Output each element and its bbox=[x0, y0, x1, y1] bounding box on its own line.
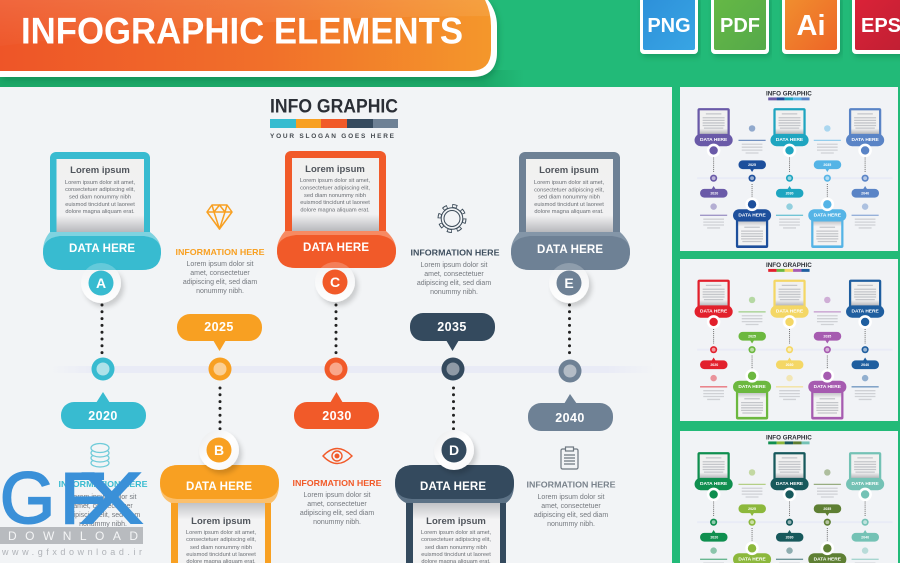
watermark: GFX Download: G bbox=[0, 459, 55, 539]
green band under header bbox=[0, 70, 672, 87]
card B: euismod tincidunt ut laoreet bbox=[186, 552, 256, 558]
thumbnail: rainbow variant: 2025 bbox=[748, 335, 756, 339]
watermark: GFX Download: F bbox=[60, 459, 106, 539]
year bubble 2040 bbox=[528, 394, 613, 431]
information block E: amet, consectetuer bbox=[541, 503, 601, 510]
marker D: D bbox=[449, 442, 459, 458]
marker D bbox=[434, 430, 474, 470]
card C: dolore magna aliquam erat. bbox=[300, 208, 370, 214]
thumbnail: rainbow variant: 2040 bbox=[861, 363, 869, 367]
pill A: DATA HERE bbox=[69, 243, 135, 255]
badge: PDF: PDF bbox=[720, 15, 760, 37]
badge: EPS bbox=[852, 0, 900, 54]
card D: sed diam nonummy nibh bbox=[425, 545, 487, 551]
information block E: Lorem ipsum dolor sit bbox=[538, 494, 605, 501]
node B bbox=[208, 358, 232, 380]
pill D: DATA HERE bbox=[420, 481, 486, 493]
column D bbox=[395, 206, 514, 563]
card A bbox=[50, 152, 150, 232]
card D: Lorem ipsum dolor sit amet, bbox=[421, 530, 492, 536]
pill C bbox=[277, 231, 396, 268]
information block C: amet, consectetuer bbox=[307, 501, 367, 508]
connector A bbox=[100, 305, 104, 353]
watermark: GFX Download bbox=[0, 459, 143, 557]
card E: euismod tincidunt ut laoreet bbox=[534, 202, 604, 208]
icon: diamond bbox=[207, 205, 232, 229]
icon: eye bbox=[323, 448, 352, 464]
information block E: INFORMATION HERE bbox=[526, 480, 616, 490]
information block D: adipiscing elit, sed diam bbox=[417, 280, 491, 287]
card E: dolore magna aliquam erat. bbox=[534, 209, 604, 215]
node D bbox=[442, 358, 464, 380]
thumbnail: blue variant: INFO GRAPHIC bbox=[766, 90, 812, 97]
timeline band bbox=[114, 366, 612, 373]
marker C: C bbox=[330, 274, 340, 290]
card C bbox=[285, 151, 386, 231]
badge: Ai bbox=[782, 0, 840, 54]
node A bbox=[92, 358, 114, 380]
information block D: Lorem ipsum dolor sit bbox=[421, 262, 488, 269]
card E: sed diam nonummy nibh bbox=[538, 194, 600, 200]
pill A bbox=[43, 232, 161, 270]
column B bbox=[160, 205, 279, 563]
card A: Lorem ipsum dolor sit amet, bbox=[65, 180, 136, 186]
thumbnail: green variant: 2020 bbox=[710, 536, 718, 540]
year bubble 2040: 2040 bbox=[555, 411, 585, 425]
year bubble 2035: 2035 bbox=[437, 320, 467, 334]
connector B bbox=[218, 388, 222, 431]
infographic heading: YOUR SLOGAN GOES HERE bbox=[270, 133, 395, 140]
information block C: Lorem ipsum dolor sit bbox=[304, 492, 371, 499]
information block C: adipiscing elit, sed diam bbox=[300, 510, 374, 517]
year bubble 2020 bbox=[61, 392, 146, 429]
card A: dolore magna aliquam erat. bbox=[65, 209, 135, 215]
marker E: E bbox=[564, 275, 574, 291]
icon: gear bbox=[440, 206, 464, 231]
card B: consectetuer adipiscing elit, bbox=[186, 537, 256, 543]
card C: consectetuer adipiscing elit, bbox=[300, 186, 370, 192]
thumbnail: rainbow variant: INFO GRAPHIC bbox=[766, 262, 812, 269]
infographic heading bbox=[270, 99, 398, 138]
watermark: GFX Download: DOWNLOAD bbox=[8, 529, 138, 543]
information block A: adipiscing elit, sed diam bbox=[66, 512, 140, 519]
badge: PNG: PNG bbox=[647, 15, 691, 37]
card E: Lorem ipsum dolor sit amet, bbox=[534, 180, 605, 186]
marker A bbox=[81, 263, 121, 303]
marker B bbox=[199, 430, 239, 470]
icon: database bbox=[91, 444, 109, 467]
year bubble 2030: 2030 bbox=[322, 409, 352, 423]
title: INFOGRAPHIC ELEMENTS bbox=[21, 10, 463, 52]
pill C: DATA HERE bbox=[303, 242, 369, 254]
watermark: GFX Download: X bbox=[80, 459, 143, 539]
card A: euismod tincidunt ut laoreet bbox=[65, 202, 135, 208]
card E bbox=[519, 152, 620, 242]
year bubble 2025 bbox=[177, 314, 262, 351]
column A bbox=[43, 152, 161, 528]
card C: Lorem ipsum dolor sit amet, bbox=[300, 178, 371, 184]
card C: Lorem ipsum bbox=[305, 164, 365, 175]
card D: consectetuer adipiscing elit, bbox=[421, 537, 491, 543]
card D: euismod tincidunt ut laoreet bbox=[421, 552, 491, 558]
pill E: DATA HERE bbox=[537, 244, 603, 256]
column E bbox=[511, 152, 630, 528]
card B: Lorem ipsum dolor sit amet, bbox=[186, 530, 257, 536]
card C: sed diam nonummy nibh bbox=[304, 193, 366, 199]
information block D: nonummy nibh. bbox=[430, 289, 478, 296]
pill E bbox=[511, 232, 630, 270]
information block B: nonummy nibh. bbox=[196, 288, 244, 295]
information block E bbox=[526, 480, 616, 528]
thumbnail: green variant: 2035 bbox=[823, 507, 831, 511]
connector C bbox=[334, 305, 338, 353]
information block E: adipiscing elit, sed diam bbox=[534, 512, 608, 519]
information block A: nonummy nibh. bbox=[79, 521, 127, 528]
information block A: Lorem ipsum dolor sit bbox=[70, 494, 137, 501]
information block B bbox=[176, 247, 265, 295]
card B bbox=[171, 503, 271, 563]
card A: sed diam nonummy nibh bbox=[69, 194, 131, 200]
card C: euismod tincidunt ut laoreet bbox=[300, 200, 370, 206]
column C bbox=[277, 151, 396, 526]
marker C bbox=[315, 262, 355, 302]
icon: clipboard bbox=[561, 447, 578, 469]
thumbnail: green variant bbox=[680, 431, 898, 563]
infographic heading: INFO GRAPHIC bbox=[270, 96, 398, 118]
badge: EPS: EPS bbox=[861, 15, 900, 37]
year bubble 2025: 2025 bbox=[204, 320, 234, 334]
pill B: DATA HERE bbox=[186, 481, 252, 493]
information block A: amet, consectetuer bbox=[73, 503, 133, 510]
information block B: Lorem ipsum dolor sit bbox=[187, 261, 254, 268]
thumbnail: green variant: 2040 bbox=[861, 536, 869, 540]
format badges bbox=[640, 0, 900, 54]
information block B: INFORMATION HERE bbox=[176, 247, 265, 257]
thumbnail: blue variant bbox=[680, 87, 898, 251]
connector E bbox=[568, 305, 571, 355]
main infographic panel bbox=[0, 87, 672, 563]
node C bbox=[324, 358, 348, 380]
thumbnail: blue variant: 2030 bbox=[786, 192, 794, 196]
marker B: B bbox=[214, 442, 224, 458]
pill B bbox=[160, 465, 279, 503]
thumbnail: green variant: 2030 bbox=[786, 536, 794, 540]
information block C bbox=[292, 478, 382, 526]
information block D: amet, consectetuer bbox=[424, 271, 484, 278]
thumbnail: rainbow variant bbox=[680, 259, 898, 421]
card D: Lorem ipsum bbox=[426, 516, 486, 527]
year bubble 2030 bbox=[294, 392, 379, 429]
information block E: nonummy nibh. bbox=[547, 521, 595, 528]
information block C: INFORMATION HERE bbox=[292, 478, 382, 488]
badge: Ai: Ai bbox=[796, 10, 826, 42]
header banner bbox=[0, 0, 497, 77]
marker A: A bbox=[96, 275, 106, 291]
thumbnail: green variant: 2025 bbox=[748, 507, 756, 511]
information block A bbox=[58, 479, 148, 528]
information block B: adipiscing elit, sed diam bbox=[183, 279, 257, 286]
card E: Lorem ipsum bbox=[539, 165, 599, 176]
connector D bbox=[452, 388, 455, 431]
card A: consectetuer adipiscing elit, bbox=[65, 187, 135, 193]
pill D bbox=[395, 465, 514, 503]
thumbnail: rainbow variant: 2020 bbox=[710, 363, 718, 367]
thumbnail: blue variant: 2020 bbox=[710, 192, 718, 196]
card A: Lorem ipsum bbox=[70, 165, 130, 176]
node E bbox=[558, 360, 582, 382]
card E: consectetuer adipiscing elit, bbox=[534, 188, 604, 194]
information block A: INFORMATION HERE bbox=[58, 479, 148, 489]
thumbnail: blue variant: 2035 bbox=[823, 163, 831, 167]
year bubble 2020: 2020 bbox=[88, 409, 118, 423]
information block B: amet, consectetuer bbox=[190, 270, 250, 277]
thumbnail: rainbow variant: 2030 bbox=[786, 363, 794, 367]
thumbnail: blue variant: 2040 bbox=[861, 192, 869, 196]
watermark: GFX Download: www.gfxdownload.ir bbox=[1, 547, 142, 557]
thumbnail: rainbow variant: 2035 bbox=[823, 335, 831, 339]
information block D: INFORMATION HERE bbox=[410, 248, 500, 258]
card D bbox=[406, 503, 506, 563]
badge: PNG bbox=[640, 0, 698, 54]
year bubble 2035 bbox=[410, 313, 495, 351]
information block D bbox=[410, 248, 500, 296]
information block C: nonummy nibh. bbox=[313, 519, 361, 526]
marker E bbox=[549, 263, 589, 303]
thumbnail: blue variant: 2025 bbox=[748, 163, 756, 167]
badge: PDF bbox=[711, 0, 769, 54]
thumbnail: green variant: INFO GRAPHIC bbox=[766, 434, 812, 441]
card B: Lorem ipsum bbox=[191, 516, 251, 527]
card B: sed diam nonummy nibh bbox=[190, 545, 252, 551]
